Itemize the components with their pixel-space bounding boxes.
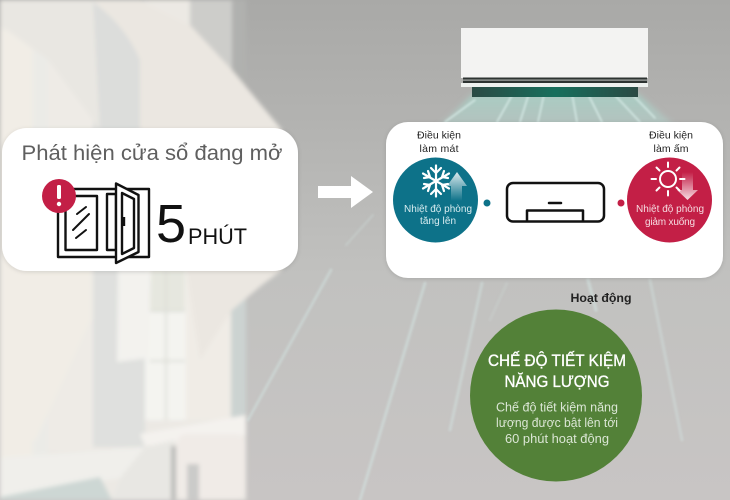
label: operation: Hoạt động	[570, 293, 632, 305]
circle: room temperature rises: tăng lên	[420, 216, 456, 227]
icon: sun	[652, 162, 684, 196]
arrow	[318, 176, 373, 208]
hanging cloth	[117, 270, 151, 362]
label: cooling condition	[417, 130, 461, 155]
heading: energy saving mode: NĂNG LƯỢNG	[504, 372, 610, 391]
text: energy saving description	[496, 400, 618, 446]
label: 5 minutes: 5	[156, 194, 186, 254]
text: energy saving description: lượng được bật lên tới	[496, 416, 618, 430]
background: window and curtains	[0, 0, 282, 500]
icon: open window	[58, 184, 149, 263]
circle: room temperature falls: giảm xuống	[645, 216, 695, 228]
icon: rising arrow	[447, 172, 467, 201]
label: 5 minutes	[156, 194, 247, 254]
radiator	[177, 434, 245, 500]
label: cooling condition: Điều kiện	[417, 130, 461, 142]
circle: room temperature rises	[393, 158, 478, 242]
curtain	[95, 0, 282, 360]
label: heating condition: Điều kiện	[649, 130, 693, 142]
circle: energy saving mode	[470, 310, 642, 482]
icon: red alert badge	[42, 179, 76, 213]
sills	[140, 415, 246, 446]
heading: energy saving mode: CHẾ ĐỘ TIẾT KIỆM	[488, 351, 626, 370]
icon: air conditioner outline	[507, 183, 604, 222]
text: energy saving description: Chế độ tiết kiệm năng	[496, 400, 618, 414]
label: heating condition	[649, 130, 693, 155]
circle: room temperature falls	[627, 158, 712, 242]
air conditioner unit	[461, 28, 648, 97]
heading: open window detected: Phát hiện cửa sổ đang mở	[22, 142, 283, 165]
dot: cooling connector	[484, 200, 490, 206]
icon: falling arrow	[677, 172, 698, 200]
text: energy saving description: 60 phút hoạt động	[505, 432, 609, 446]
air flow from the air conditioner	[248, 88, 682, 500]
dot: heating connector	[618, 200, 624, 206]
label: heating condition: làm ấm	[654, 143, 689, 155]
label: 5 minutes: PHÚT	[188, 224, 247, 249]
circle: room temperature rises: Nhiệt độ phòng	[404, 204, 472, 215]
panel: open window detection	[2, 128, 298, 271]
icon: snowflake	[423, 166, 449, 196]
heading: energy saving mode	[488, 351, 626, 391]
panel: operating conditions	[386, 122, 723, 278]
circle: room temperature falls: Nhiệt độ phòng	[636, 204, 704, 215]
label: cooling condition: làm mát	[420, 143, 459, 155]
